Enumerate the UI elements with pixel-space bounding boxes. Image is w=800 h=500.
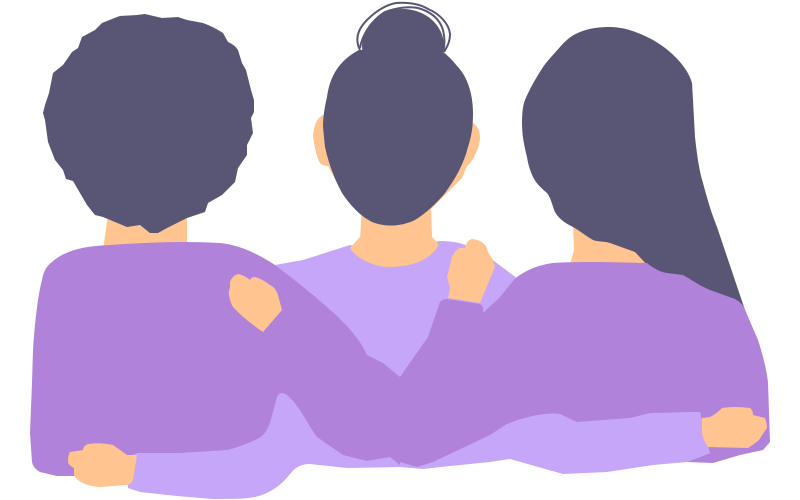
middle person: sweater collar skin: [350, 237, 439, 267]
right person: long hair: [522, 27, 745, 310]
middle person: neck: [350, 205, 439, 248]
right person's hand at the waist: [702, 407, 767, 448]
middle person: hair bun strands: [357, 3, 450, 52]
middle person: ears and jaw skin: [313, 115, 480, 225]
left person's hand at the waist: [68, 443, 137, 487]
middle person: hair bun: [362, 9, 444, 83]
right person: neck: [569, 220, 650, 270]
middle person: head of hair: [323, 50, 473, 226]
hand on left person's shoulder: [229, 274, 282, 332]
left person: neck: [103, 215, 187, 250]
middle person: sweater and sleeves: [125, 241, 710, 499]
hand on middle person's shoulder: [447, 239, 495, 303]
left person: curly hair: [43, 14, 254, 233]
left and right persons: darker sweaters joined at the arm: [30, 242, 770, 476]
